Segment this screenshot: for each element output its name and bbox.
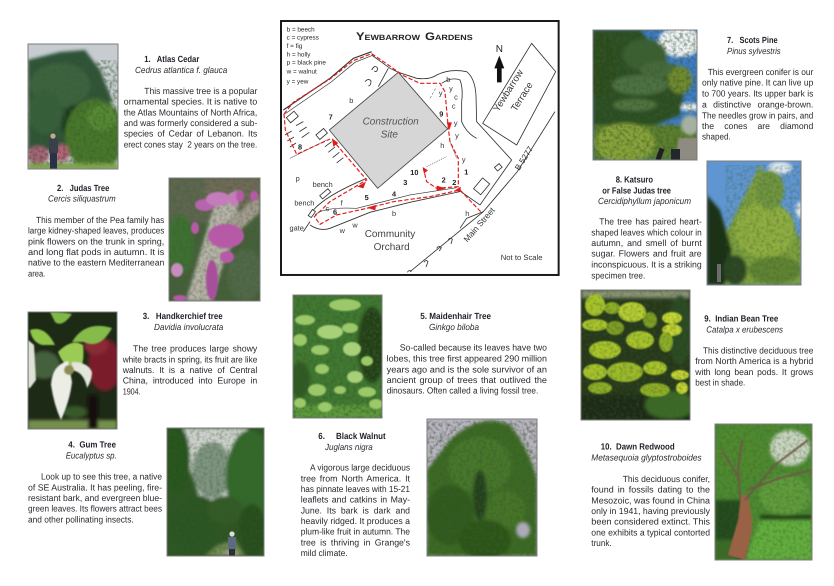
- description: judas tree: pink flowers on the trunk in spring,: [28, 236, 164, 246]
- description: judas tree: large kidney-shaped leaves, produces: [28, 226, 165, 236]
- map: tree numbers: 5: [365, 193, 369, 202]
- description: dawn redwood: only in 1941, having previously: [591, 506, 711, 516]
- map: tree letters and place labels: gate: [290, 224, 304, 232]
- map roads and boundaries: [283, 52, 555, 272]
- map: tree letters and place labels: c: [454, 93, 458, 101]
- map: tree numbers: 2: [452, 178, 456, 187]
- map: construction site: Construction: [363, 116, 419, 127]
- map: street and terrace labels: B 5277: [513, 145, 535, 172]
- heading: scots pine: 7. Scots Pine: [727, 35, 778, 45]
- description: black walnut: heavily ridged. It produces a: [301, 516, 410, 526]
- map legend: c = cypress: [287, 34, 319, 41]
- description: maidenhair tree: [387, 343, 547, 396]
- photo: handkerchief tree: [28, 312, 122, 430]
- description: maidenhair tree: ancient group of trees that outlived the: [387, 375, 547, 385]
- map: tree numbers: 6: [333, 208, 337, 216]
- description: katsuro: [591, 217, 702, 280]
- description: atlas cedar: species of Cedar of Lebanon. Its: [124, 129, 258, 139]
- heading: judas tree: 2. Judas Tree: [57, 183, 109, 193]
- map legend: y = yew: [287, 78, 308, 85]
- description: dawn redwood: [591, 474, 711, 548]
- description: scots pine: only native pine. It can live up: [702, 78, 813, 88]
- map: tree letters and place labels: y: [439, 89, 442, 97]
- map: tree numbers: 10: [410, 168, 418, 177]
- map: street and terrace labels: Yewbarrow: [491, 67, 526, 114]
- description: atlas cedar: [124, 86, 258, 149]
- map: tree letters and place labels: y: [455, 131, 459, 140]
- map: tree letters and place labels: y: [462, 155, 465, 164]
- map: scale note: Not to Scale: [501, 253, 543, 262]
- map: tree numbers: 7: [329, 113, 333, 121]
- text: maidenhair tree: [387, 311, 547, 396]
- description: katsuro: shaped leaves which colour in: [591, 227, 702, 237]
- description: black walnut: leaflets and catkins in May-: [301, 495, 410, 505]
- photo: atlas cedar: [27, 44, 125, 171]
- latin name: metasequoia: Metasequoia glyptostroboides: [591, 453, 702, 463]
- description: atlas cedar: and was formerly considered a sub-: [124, 118, 257, 128]
- photo: maidenhair tree: [290, 295, 386, 419]
- map: tree letters and place labels: b: [349, 96, 353, 105]
- description: katsuro: autumn, and smell of burnt: [591, 238, 702, 248]
- description: gum tree: Look up to see this tree, a native: [41, 472, 162, 482]
- text: judas tree: [28, 183, 165, 278]
- heading: atlas cedar: 1. Atlas Cedar: [144, 54, 200, 64]
- map legend: w = walnut: [286, 68, 317, 75]
- heading: indian bean tree: 9. Indian Bean Tree: [704, 314, 778, 324]
- heading: black walnut: 6. Black Walnut: [318, 431, 386, 441]
- text: gum tree: [28, 440, 163, 524]
- map: tree letters and place labels: b: [446, 75, 450, 84]
- map: tree letters and place labels: f: [341, 199, 343, 207]
- map: tree numbers: 4: [392, 190, 396, 198]
- map: community orchard label: [365, 228, 415, 252]
- description: dawn redwood: trunk.: [591, 538, 612, 548]
- latin name: pinus: Pinus sylvestris: [727, 46, 781, 56]
- description: handkerchief tree: white bracts in spring, its fruit are like: [122, 354, 257, 364]
- latin name: davidia: Davidia involucrata: [154, 322, 223, 332]
- text: indian bean tree: [694, 314, 814, 388]
- description: black walnut: tree from North America. It: [301, 473, 411, 483]
- map legend: f = fig: [287, 43, 302, 50]
- description: dawn redwood: This deciduous conifer,: [623, 474, 710, 484]
- description: maidenhair tree: years ago and is the sole survivor of an: [387, 364, 547, 374]
- description: gum tree: green leaves. Its flowers attract bees: [28, 504, 163, 514]
- description: katsuro: inconspicuous. It is a striking: [591, 259, 702, 269]
- map: tree letters and place labels: [290, 75, 469, 235]
- description: atlas cedar: ornamental species. It is native to: [124, 97, 257, 107]
- latin name: ginkgo: Ginkgo biloba: [429, 322, 479, 332]
- map: tree numbers: 1: [464, 168, 468, 176]
- description: judas tree: native to the eastern Mediterranean: [28, 258, 164, 268]
- description: scots pine: shaped.: [702, 132, 731, 142]
- map: construction site: [329, 72, 448, 188]
- map: tree letters and place labels: h: [440, 141, 444, 150]
- description: black walnut: A vigorous large deciduous: [310, 463, 411, 473]
- icon: north arrow: [494, 43, 504, 82]
- photo: black walnut: [426, 419, 537, 560]
- text: handkerchief tree: [122, 311, 258, 396]
- text: katsuro: [591, 174, 702, 280]
- map: tree numbers: [298, 110, 468, 216]
- description: maidenhair tree: So-called because its leaves have two: [400, 343, 547, 353]
- photo: katsuro: [707, 161, 804, 285]
- latin name: cercis: Cercis siliquastrum: [48, 194, 116, 204]
- map: tree letters and place labels: bench: [313, 180, 333, 189]
- map: construction site: Site: [381, 129, 398, 140]
- map legend: b = beech: [287, 26, 315, 33]
- description: scots pine: the cones are diamond: [702, 121, 813, 131]
- map: community orchard label: Orchard: [374, 241, 410, 252]
- map: tree letters and place labels: w: [339, 226, 345, 235]
- description: handkerchief tree: China, introduced into Europe in: [123, 376, 257, 386]
- description: black walnut: has pinnate leaves with 15-21: [301, 484, 410, 494]
- description: dawn redwood: one exhibits a typical contorted: [591, 527, 710, 537]
- map: tree numbers: 9: [439, 110, 443, 118]
- map: walking route: [284, 54, 481, 224]
- heading: katsuro: [602, 174, 671, 195]
- map: street and terrace labels: [462, 67, 535, 244]
- photo: dawn redwood: [715, 424, 812, 560]
- map: parking bays and small structures: [285, 67, 502, 272]
- description: gum tree: and other pollinating insects.: [28, 514, 134, 524]
- map: Yewbarrow Gardens: [281, 21, 559, 275]
- description: katsuro: The tree has paired heart-: [599, 217, 702, 227]
- photo: judas tree: [166, 178, 263, 301]
- description: katsuro: specimen tree.: [591, 270, 645, 280]
- map: tree letters and place labels: c: [325, 204, 329, 213]
- description: handkerchief tree: [122, 344, 258, 396]
- heading: maidenhair tree: 5. Maidenhair Tree: [420, 311, 491, 321]
- description: indian bean tree: from North America is a hybrid: [695, 356, 813, 366]
- description: dawn redwood: found in fossils dating to the: [591, 485, 710, 495]
- map: tree letters and place labels: y: [449, 84, 453, 93]
- text: dawn redwood: [591, 442, 711, 548]
- latin name: cercidiphyllum: Cercidiphyllum japonicum: [598, 196, 691, 206]
- map legend: p = black pine: [287, 59, 326, 66]
- map: terrace building outline: [483, 43, 556, 145]
- latin name: catalpa: Catalpa x erubescens: [706, 325, 784, 335]
- map: street and terrace labels: Main Street: [462, 206, 497, 244]
- map: tree letters and place labels: h: [465, 209, 469, 218]
- description: judas tree: and long flat pods in autumn. It is: [28, 247, 165, 257]
- description: handkerchief tree: 1904.: [123, 386, 141, 396]
- description: black walnut: tree is thriving in Grange's: [301, 537, 411, 547]
- description: black walnut: [301, 463, 411, 558]
- description: scots pine: The needles grow in pairs, and: [702, 110, 813, 120]
- description: scots pine: This evergreen conifer is our: [708, 67, 813, 77]
- description: indian bean tree: best in shade.: [695, 378, 745, 388]
- map legend: [286, 26, 326, 85]
- description: dawn redwood: Mesozoic, was found in China: [591, 495, 710, 505]
- description: indian bean tree: with long bean pods. It grows: [694, 367, 814, 377]
- heading: dawn redwood: 10. Dawn Redwood: [601, 442, 675, 452]
- latin name: eucalyptus: Eucalyptus sp.: [66, 450, 117, 460]
- map legend: h = holly: [287, 51, 311, 58]
- map: tree letters and place labels: b: [392, 209, 396, 218]
- map: street and terrace labels: Terrace: [509, 80, 535, 113]
- description: judas tree: area.: [28, 268, 45, 278]
- description: katsuro: sugar. Flowers and fruit are: [591, 249, 702, 259]
- map: tree letters and place labels: c: [452, 102, 455, 110]
- text: black walnut: [301, 431, 411, 558]
- icon: north arrow: N: [496, 43, 503, 54]
- photo: scots pine: [592, 30, 698, 160]
- description: atlas cedar: erect cones stay 2 years on the tree.: [124, 139, 257, 149]
- map: tree letters and place labels: w: [352, 221, 358, 229]
- heading: handkerchief tree: 3. Handkerchief tree: [143, 311, 223, 321]
- description: black walnut: mild climate.: [301, 548, 348, 558]
- description: atlas cedar: the Atlas Mountains of North Africa,: [124, 107, 257, 117]
- photo: gum tree: [166, 426, 274, 556]
- map: tree letters and place labels: p: [296, 174, 300, 183]
- description: judas tree: This member of the Pea family has: [36, 215, 165, 225]
- map: tree numbers: 2: [442, 176, 446, 184]
- text: scots pine: [702, 35, 814, 142]
- heading: katsuro: or False Judas tree: [602, 185, 671, 195]
- map: tree numbers: 8: [298, 143, 302, 151]
- description: maidenhair tree: lobes, this tree first appeared 290 million: [387, 353, 547, 363]
- description: handkerchief tree: walnuts. It is a native of Central: [122, 365, 257, 375]
- description: indian bean tree: [694, 345, 814, 388]
- map title: YEWBARROW GARDENS: [356, 30, 473, 42]
- map: community orchard label: Community: [365, 228, 415, 239]
- latin name: cedrus: Cedrus atlantica f. glauca: [135, 65, 227, 75]
- map: tree letters and place labels: bench: [294, 199, 314, 207]
- description: scots pine: to 700 years. Its upper bark is: [702, 88, 814, 98]
- map: tree numbers: 3: [403, 178, 407, 187]
- description: dawn redwood: been considered extinct. This: [591, 517, 711, 527]
- photo: indian bean tree: [581, 290, 695, 420]
- description: judas tree: [28, 215, 165, 278]
- latin name: juglans: Juglans nigra: [324, 442, 373, 452]
- description: scots pine: [702, 67, 814, 142]
- description: black walnut: June. Its bark is dark and: [301, 505, 410, 515]
- description: black walnut: plum-like fruit in autumn. The: [301, 527, 410, 537]
- description: scots pine: a distinctive orange-brown.: [702, 100, 813, 110]
- heading: katsuro: 8. Katsuro: [616, 174, 653, 184]
- description: indian bean tree: This distinctive deciduous tree: [703, 345, 813, 355]
- map: tree letters and place labels: y: [454, 119, 457, 127]
- description: maidenhair tree: dinosaurs. Often called a living fossil tree.: [387, 386, 538, 396]
- description: gum tree: resistant bark, and evergreen blue-: [28, 493, 162, 503]
- text: atlas cedar: [124, 54, 258, 149]
- description: gum tree: of SE Australia. It has peeling, fire-: [28, 482, 162, 492]
- description: handkerchief tree: The tree produces large showy: [133, 344, 258, 354]
- description: gum tree: [28, 472, 163, 524]
- description: atlas cedar: This massive tree is a popular: [144, 86, 257, 96]
- map: route arrows: [332, 122, 461, 210]
- heading: gum tree: 4. Gum Tree: [68, 440, 116, 450]
